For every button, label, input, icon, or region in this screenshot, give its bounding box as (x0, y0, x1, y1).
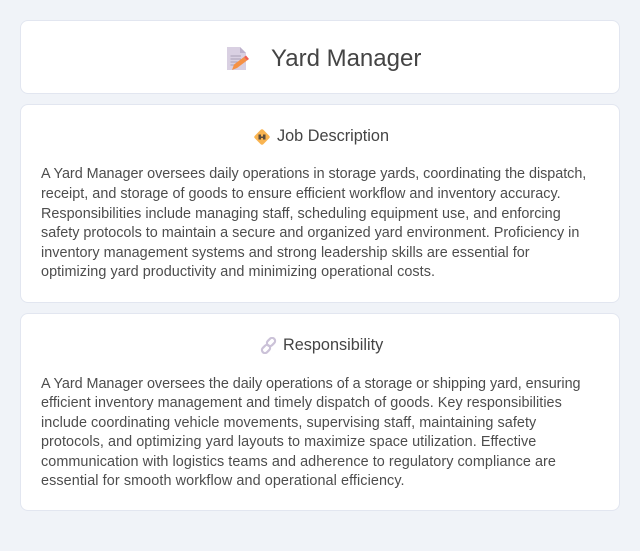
panel: title card (20, 20, 620, 94)
text block: job description: A Yard Manager oversees daily operations in storage yards, coordinating the dispatch, (41, 166, 586, 182)
text block: responsibility: include coordinating vehicle movements, supervising staff, maintaining safety (41, 415, 536, 431)
heading: responsibility: Responsibility (283, 336, 383, 354)
panel: responsibility (20, 313, 620, 511)
text block: responsibility (41, 376, 580, 489)
text block: responsibility: essential for smooth workflow and operational efficiency. (41, 473, 405, 489)
panel: job description (20, 104, 620, 303)
title: Yard Manager (271, 45, 421, 72)
text block: responsibility: communication with logistics teams and adherence to regulatory compliance are (41, 454, 556, 470)
text block: job description (41, 166, 586, 280)
icon: yellow diamond sign (254, 129, 270, 145)
text block: job description: inventory management systems and strong leadership skills are essential for (41, 245, 530, 261)
text block: job description: Responsibilities include managing staff, scheduling equipment use, and enforcing (41, 206, 561, 222)
icon: document with pencil (227, 47, 249, 70)
heading: job description: Job Description (277, 127, 389, 145)
text block: job description: safety protocols to maintain a secure and organized yard environment. Proficiency in (41, 225, 579, 241)
icon: chain link (260, 337, 276, 354)
text block: responsibility: A Yard Manager oversees the daily operations of a storage or shipping yard, ensuring (41, 376, 580, 392)
text block: job description: optimizing yard productivity and minimizing operational costs. (41, 264, 435, 280)
text block: job description: receipt, and storage of goods to ensure efficient workflow and inventory accuracy. (41, 186, 561, 202)
text block: responsibility: efficient inventory management and timely dispatch of goods. Key responsibilities (41, 395, 562, 411)
text block: responsibility: protocols, and optimizing yard layouts to maximize space utilization. Effective (41, 434, 536, 450)
